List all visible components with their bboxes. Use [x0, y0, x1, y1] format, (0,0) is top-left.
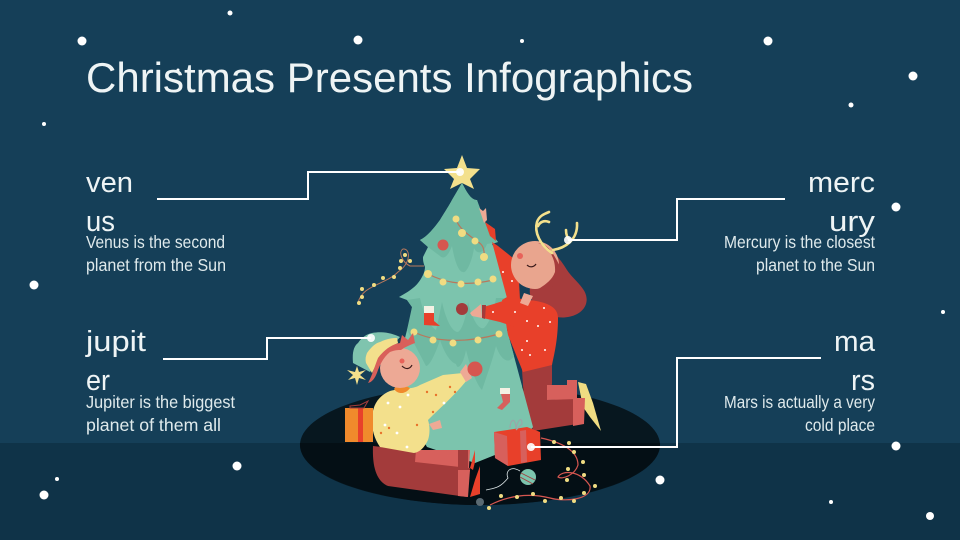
girl [470, 208, 566, 372]
connector: jupiter [163, 334, 375, 359]
floor string of lights [487, 438, 597, 510]
text block: venus: ven [86, 167, 133, 199]
floor shadow ellipse [300, 385, 660, 505]
orange gift [345, 401, 373, 442]
girl hair back [520, 244, 587, 318]
text block: venus: us [86, 206, 115, 238]
text block: mars: ma [834, 326, 876, 358]
text block: jupiter: er [86, 365, 110, 397]
tree lights [410, 216, 502, 346]
text block: mars: cold place [805, 415, 875, 435]
text block: jupiter [85, 326, 235, 435]
text block: jupiter: jupit [85, 326, 146, 358]
tree [399, 183, 533, 463]
tree garlands [414, 219, 499, 340]
text block: venus: planet from the Sun [86, 255, 226, 275]
text block: venus: Venus is the second [86, 232, 225, 252]
connector: mercury [564, 199, 785, 244]
floor band [0, 443, 960, 540]
star [444, 155, 480, 189]
left string of lights [357, 249, 424, 305]
text block: mars: rs [851, 365, 875, 397]
text block: mercury: Mercury is the closest [724, 232, 875, 252]
tree ornaments [438, 240, 448, 250]
girl legs and boots [520, 340, 601, 431]
text block: mercury: planet to the Sun [756, 255, 875, 275]
text block: mercury: merc [808, 167, 875, 199]
connector: mars [527, 358, 821, 451]
text block: jupiter: Jupiter is the biggest [86, 392, 235, 412]
connector: venus [157, 168, 464, 199]
green bauble [486, 469, 536, 490]
kid [347, 332, 482, 497]
text block: venus [86, 167, 226, 275]
text block: jupiter: planet of them all [86, 415, 221, 435]
text block: mercury: ury [829, 206, 876, 238]
text block: mars: Mars is actually a very [724, 392, 875, 412]
red gift [494, 420, 541, 466]
illustration: tree and children [345, 155, 601, 510]
text block: mercury [724, 167, 876, 275]
title: Christmas Presents Infographics [86, 54, 693, 101]
antlers [536, 212, 577, 253]
text block: mars [724, 326, 876, 435]
